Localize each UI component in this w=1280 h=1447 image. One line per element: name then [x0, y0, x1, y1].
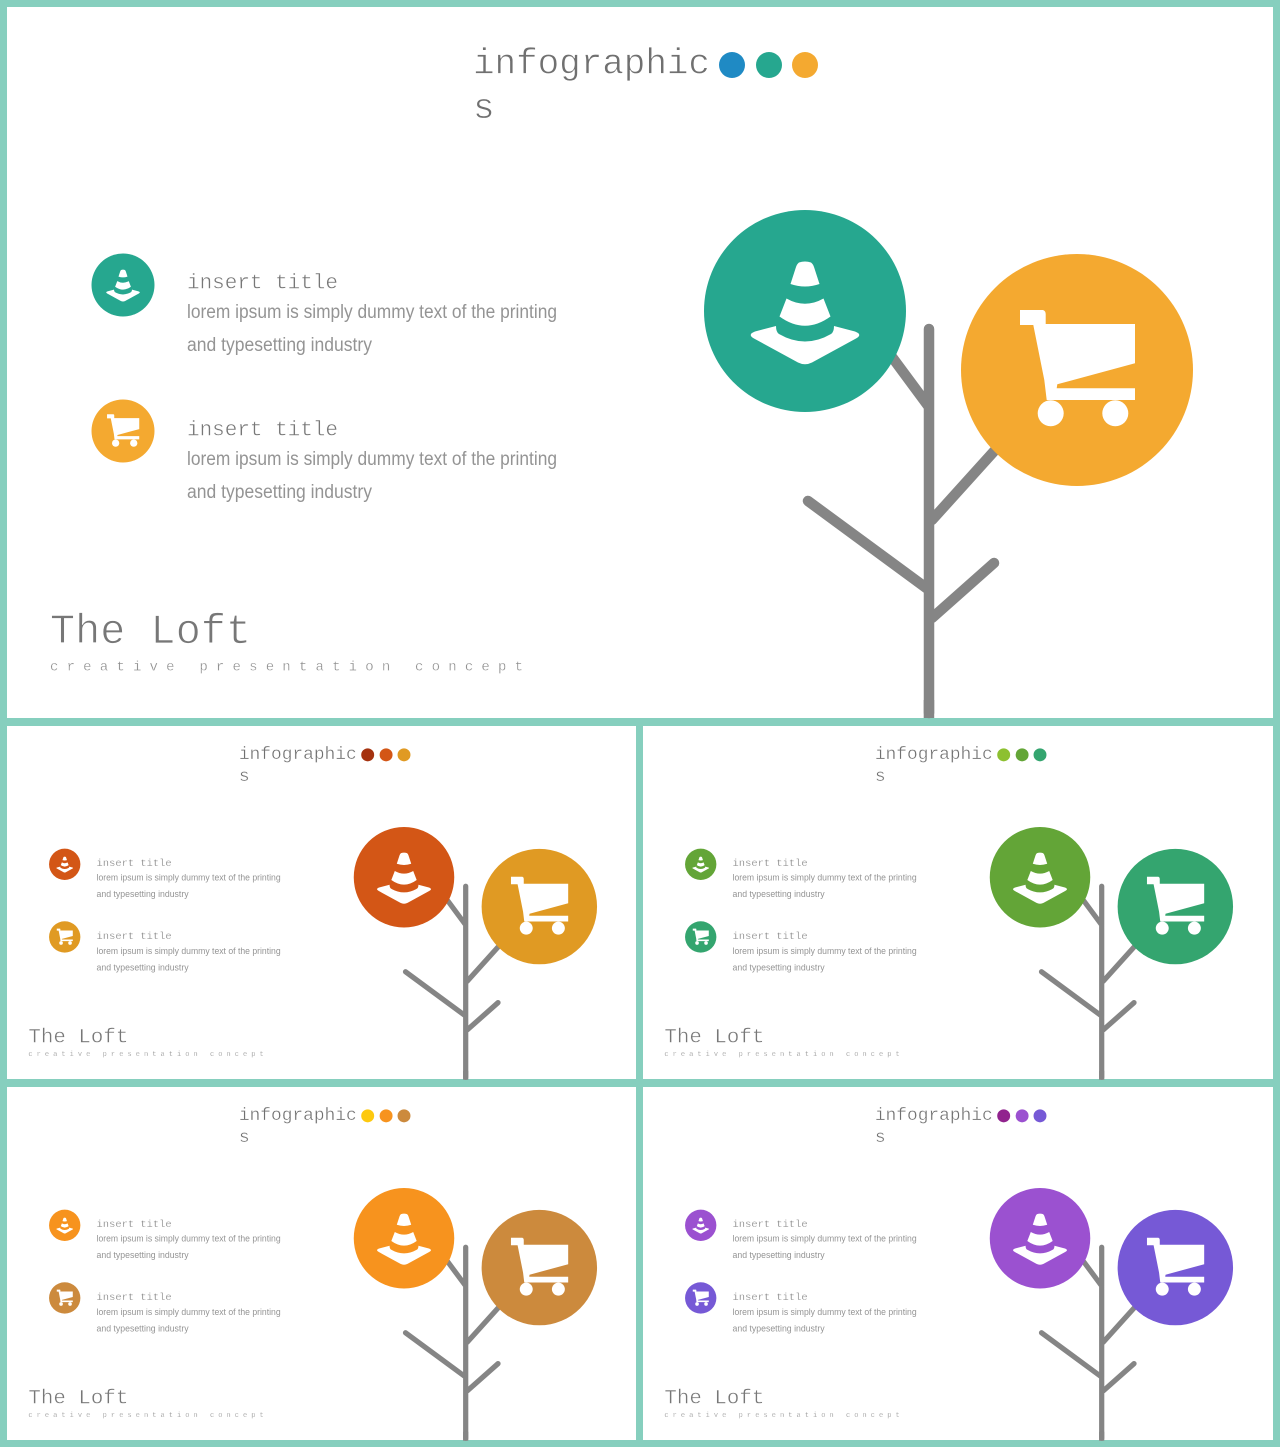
list item 2: and typesetting industry — [97, 1323, 189, 1334]
colour dots — [997, 1109, 1046, 1122]
heading: infographic — [875, 745, 993, 765]
list item 2 — [49, 921, 281, 973]
list item 2: lorem ipsum is simply dummy text of the printing — [97, 1307, 281, 1318]
panel: main slide — [7, 7, 1273, 718]
heading: s — [875, 1128, 886, 1148]
brand name: The Loft — [664, 1387, 764, 1410]
tagline: creative presentation concept — [664, 1051, 900, 1059]
cone circle — [354, 1188, 454, 1288]
panel: purple variant — [643, 1087, 1273, 1441]
list item 2: insert title — [187, 420, 338, 442]
tagline: creative presentation concept — [28, 1412, 264, 1420]
tree — [808, 329, 997, 713]
heading — [875, 1106, 993, 1148]
heading: infographic — [473, 44, 710, 84]
list item 2: insert title — [733, 1292, 808, 1304]
heading — [239, 745, 357, 787]
list item 2 — [92, 400, 557, 503]
list item 1 — [49, 849, 281, 900]
heading: infographic — [239, 1106, 357, 1126]
cart circle — [482, 1210, 597, 1325]
list item 2: lorem ipsum is simply dummy text of the printing — [733, 946, 917, 957]
list item 2: lorem ipsum is simply dummy text of the printing — [187, 449, 557, 470]
list item 1: and typesetting industry — [97, 1250, 189, 1261]
tree — [1042, 886, 1136, 1077]
cart circle — [961, 254, 1193, 486]
cone circle — [704, 210, 906, 412]
list item 2: lorem ipsum is simply dummy text of the printing — [97, 946, 281, 957]
cart circle — [482, 849, 597, 964]
list item 1 — [685, 1210, 917, 1261]
heading: s — [875, 767, 886, 787]
list item 2: and typesetting industry — [733, 1323, 825, 1334]
list item 1: lorem ipsum is simply dummy text of the printing — [733, 873, 917, 884]
tree — [406, 1247, 500, 1438]
list item 2: and typesetting industry — [97, 962, 189, 973]
list item 1: insert title — [97, 1219, 172, 1231]
list item 1: lorem ipsum is simply dummy text of the printing — [97, 1234, 281, 1245]
colour dots — [361, 748, 410, 761]
list item 2: insert title — [733, 931, 808, 943]
panel: orange variant — [7, 726, 636, 1080]
tagline: creative presentation concept — [664, 1412, 900, 1420]
tree — [1042, 1247, 1136, 1438]
list item 2: and typesetting industry — [187, 482, 372, 503]
brand name: The Loft — [28, 1026, 128, 1049]
brand name: The Loft — [28, 1387, 128, 1410]
list item 1: lorem ipsum is simply dummy text of the printing — [733, 1234, 917, 1245]
list item 1: insert title — [97, 858, 172, 870]
heading — [875, 745, 993, 787]
list item 1 — [92, 254, 557, 356]
brand name: The Loft — [50, 608, 251, 656]
list item 1: and typesetting industry — [187, 335, 372, 356]
panel: amber variant — [7, 1087, 636, 1441]
heading: infographic — [875, 1106, 993, 1126]
list item 2 — [49, 1282, 281, 1334]
heading: s — [473, 88, 495, 129]
list item 1: lorem ipsum is simply dummy text of the printing — [97, 873, 281, 884]
colour dots — [361, 1109, 410, 1122]
list item 1: and typesetting industry — [733, 1250, 825, 1261]
list item 1: insert title — [733, 1219, 808, 1231]
list item 1: lorem ipsum is simply dummy text of the printing — [187, 302, 557, 323]
list item 2: and typesetting industry — [733, 962, 825, 973]
list item 1: insert title — [733, 858, 808, 870]
list item 1 — [49, 1210, 281, 1261]
colour dots — [997, 748, 1046, 761]
list item 2: lorem ipsum is simply dummy text of the printing — [733, 1307, 917, 1318]
cone circle — [354, 827, 454, 927]
cone circle — [990, 1188, 1090, 1288]
list item 2 — [685, 1282, 917, 1334]
heading: infographic — [239, 745, 357, 765]
list item 1: and typesetting industry — [733, 889, 825, 900]
colour dots — [719, 52, 818, 78]
cart circle — [1118, 849, 1233, 964]
list item 2 — [685, 921, 917, 973]
list item 1: insert title — [187, 272, 338, 296]
tagline: creative presentation concept — [50, 660, 523, 676]
heading: s — [239, 767, 250, 787]
list item 2: insert title — [97, 931, 172, 943]
heading: s — [239, 1128, 250, 1148]
cone circle — [990, 827, 1090, 927]
tagline: creative presentation concept — [28, 1051, 264, 1059]
panel: green variant — [643, 726, 1273, 1080]
list item 1 — [685, 849, 917, 900]
list item 2: insert title — [97, 1292, 172, 1304]
cart circle — [1118, 1210, 1233, 1325]
list item 1: and typesetting industry — [97, 889, 189, 900]
heading — [239, 1106, 357, 1148]
tree — [406, 886, 500, 1077]
brand name: The Loft — [664, 1026, 764, 1049]
heading — [473, 44, 710, 129]
